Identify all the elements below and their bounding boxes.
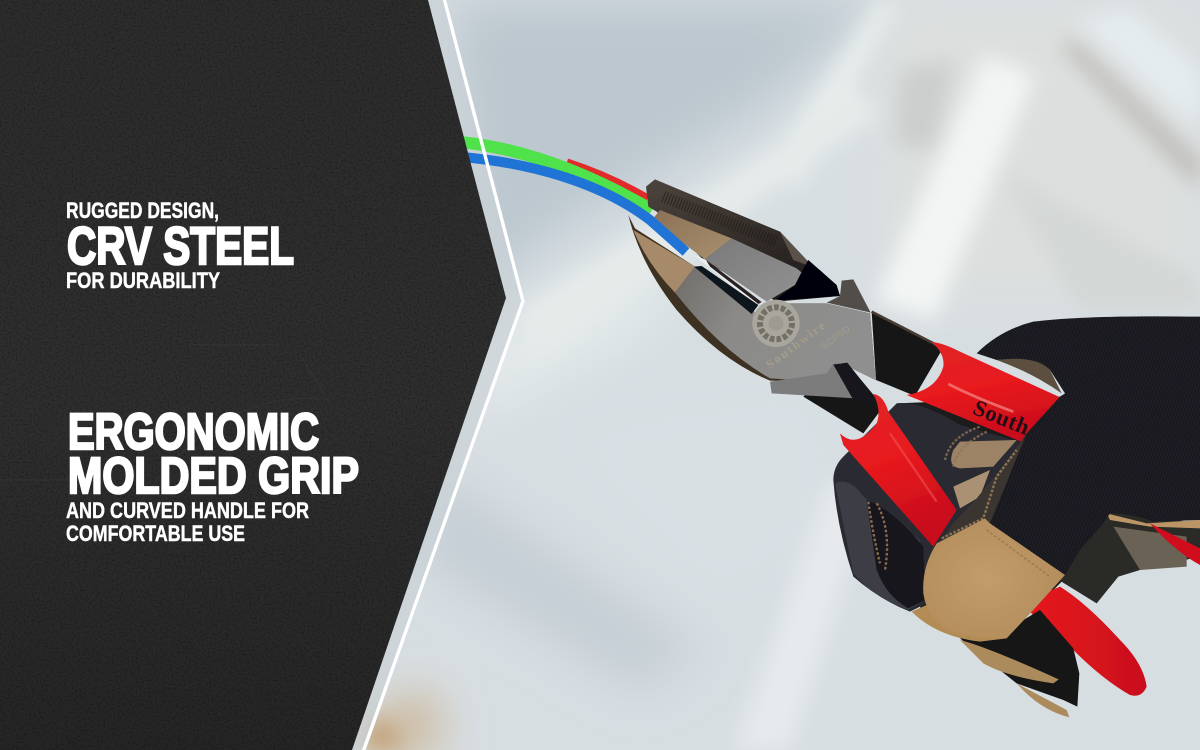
lower red grip xyxy=(840,394,957,547)
lower jaw xyxy=(628,215,876,382)
gloved hand xyxy=(833,316,1200,717)
seam strip xyxy=(940,433,1027,542)
thumb and palm side xyxy=(833,403,1020,612)
tan thumb patch xyxy=(923,518,1065,638)
text block: CRV steel: RUGGED DESIGN, xyxy=(66,198,219,223)
pliers xyxy=(628,179,943,433)
inner tan pieces xyxy=(951,440,1017,468)
grip brand: South xyxy=(970,395,1034,440)
lower fingers xyxy=(960,610,1079,707)
tan cuff sliver xyxy=(912,605,1007,642)
right side glove fold xyxy=(1053,510,1200,603)
knuckle patch xyxy=(997,359,1062,393)
text block: CRV steel xyxy=(66,198,294,293)
text block: ergonomic molded grip xyxy=(66,403,359,546)
engraved model: SCP9D xyxy=(819,323,852,352)
engraved brand: Southwire xyxy=(763,318,828,372)
text block: CRV steel: CRV STEEL xyxy=(67,217,294,276)
upper handle sleeve xyxy=(872,312,943,396)
text block: ergonomic molded grip: COMFORTABLE USE xyxy=(66,521,245,546)
text block: ergonomic molded grip: MOLDED GRIP xyxy=(68,447,359,504)
cutter slot and gap xyxy=(694,255,762,304)
coloured wires: green and red xyxy=(460,142,652,210)
black knit fingers xyxy=(977,316,1200,575)
blue wire xyxy=(462,157,686,252)
translucent band behind the panel edge xyxy=(352,0,525,750)
panel: dark textured chevron xyxy=(0,0,510,750)
upper jaw xyxy=(646,179,840,302)
text block: CRV steel: FOR DURABILITY xyxy=(66,268,220,293)
lower red handle tail xyxy=(1020,587,1147,696)
upper red grip xyxy=(907,342,1073,447)
pivot logo xyxy=(752,300,800,347)
text block: ergonomic molded grip: AND CURVED HANDLE FOR xyxy=(66,498,309,523)
white chevron outline xyxy=(363,0,523,750)
far red handle xyxy=(1150,523,1200,565)
text block: ergonomic molded grip: ERGONOMIC xyxy=(68,403,319,460)
lower handle sleeve xyxy=(803,363,883,433)
lower plate xyxy=(770,363,855,398)
dark base that closes gaps xyxy=(897,397,1120,637)
